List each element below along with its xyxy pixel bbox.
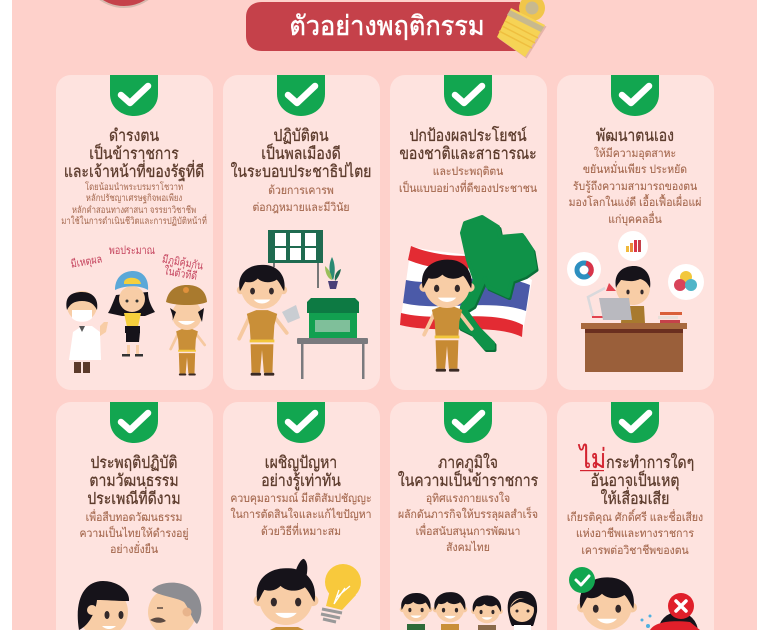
- card 8 heading: อันอาจเป็นเหตุ: [591, 470, 679, 491]
- desk: [581, 323, 687, 372]
- card 3 body text: เป็นแบบอย่างที่ดีของประชาชน: [399, 179, 538, 195]
- icon: venn bubble: [668, 264, 704, 300]
- card 2 heading: ในระบอบประชาธิปไตย: [231, 162, 371, 181]
- card 1 body text: หลักปรัชญาเศรษฐกิจพอเพียง: [86, 192, 182, 204]
- card 5 heading: ประเพณีที่ดีงาม: [87, 487, 181, 508]
- card 3 body text: และประพฤติตน: [433, 166, 504, 178]
- card 6 heading: เผชิญปัญหา: [265, 454, 337, 472]
- card 5 heading: ตามวัฒนธรรม: [89, 472, 179, 490]
- card 1 body text: มาใช้ในการดำเนินชีวิตและการปฏิบัติหน้าที่: [61, 214, 207, 226]
- figure: officer at desk: [615, 266, 650, 323]
- card 8 body text: เคารพต่อวิชาชีพของตน: [581, 544, 689, 557]
- card 8 heading: ไม่กระทำการใดๆ: [578, 443, 694, 474]
- panel: card 3 protect nation: [390, 75, 547, 390]
- figures: four civil servants: [400, 591, 537, 630]
- card 2 body text: ด้วยการเคารพ: [268, 185, 334, 197]
- card 5 body text: [79, 508, 189, 556]
- panel: card 4 self development: [557, 75, 714, 390]
- icon: green check badge: [277, 402, 325, 443]
- icon: light bulb: [321, 564, 361, 622]
- card 6 body text: ควบคุมอารมณ์ มีสติสัมปชัญญะ: [230, 492, 372, 505]
- card 6 heading: อย่างรู้เท่าทัน: [261, 472, 341, 490]
- notice board: [268, 230, 323, 288]
- card 7 body text: สังคมไทย: [446, 541, 490, 554]
- card 1 body text: โดยน้อมนำพระบรมราโชวาท: [85, 181, 183, 192]
- card 1 heading: เป็นข้าราชการ: [89, 143, 179, 163]
- icon: donut chart bubble: [567, 252, 601, 286]
- panel: card 8 no disrepute: [557, 402, 714, 630]
- card 5 body text: ความเป็นไทยให้ดำรงอยู่: [79, 525, 189, 540]
- computer monitor: [599, 298, 632, 320]
- card 7 body text: อุทิศแรงกายแรงใจ: [426, 492, 510, 505]
- card 5 body text: เพื่อสืบทอดวัฒนธรรม: [86, 508, 182, 524]
- card 1 body text: หลักคำสอนทางศาสนา จรรยาวิชาชีพ: [72, 204, 196, 215]
- icon: green check badge: [444, 75, 492, 116]
- icon: green check badge: [611, 402, 659, 443]
- card 7 heading: ภาคภูมิใจ: [438, 453, 498, 472]
- icon: green check badge: [110, 75, 158, 116]
- labels around figures: [70, 245, 204, 283]
- icon: green check badge: [277, 75, 325, 116]
- card 1 body text: [61, 181, 207, 226]
- card 1 heading: [64, 127, 204, 181]
- card 4 body text: ขยันหมั่นเพียร ประหยัด: [583, 160, 687, 176]
- figure: elderly man: [148, 583, 201, 630]
- labels around figures: ในตัวที่ดี: [163, 262, 198, 283]
- card 6 body text: ด้วยวิธีที่เหมาะสม: [261, 522, 341, 538]
- icon: wrong mark: [668, 593, 694, 619]
- icon: correct mark: [569, 567, 595, 593]
- card 6 body text: [230, 492, 372, 538]
- card 2 body text: ต่อกฎหมายและมีวินัย: [253, 201, 349, 214]
- card 5 body text: อย่างยั่งยืน: [110, 540, 158, 556]
- Thai flag: [400, 246, 532, 337]
- card 3 heading: ของชาติและสาธารณะ: [399, 145, 537, 163]
- card 6 heading: [261, 454, 341, 490]
- figure: girl with cap: [108, 271, 155, 356]
- card 8 body text: [567, 508, 703, 557]
- icon: golden rank tag: [497, 0, 546, 58]
- figure: officer voting: [237, 265, 300, 376]
- card 7 heading: [398, 453, 538, 490]
- panel: card 7 pride: [390, 402, 547, 630]
- card 7 heading: ในความเป็นข้าราชการ: [398, 470, 538, 490]
- card 7 body text: ผลักดันภารกิจให้บรรลุผลสำเร็จ: [398, 506, 538, 521]
- icon: bar chart bubble: [618, 231, 648, 261]
- panel: card 1 conduct: [56, 75, 213, 390]
- card 2 heading: เป็นพลเมืองดี: [261, 143, 341, 163]
- card 2 body text: [253, 185, 349, 214]
- card 7 body text: [398, 492, 538, 554]
- figure: doctor: [66, 291, 108, 373]
- card 8 body text: เกียรติคุณ ศักดิ์ศรี และชื่อเสียง: [567, 508, 703, 524]
- card 2 heading: ปฏิบัติตน: [274, 127, 329, 145]
- card 4 body text: รับรู้ถึงความสามารถของตน: [573, 181, 698, 193]
- card 8 heading: ให้เสื่อมเสีย: [601, 487, 669, 508]
- stack of books: [658, 312, 682, 323]
- labels around figures: พอประมาณ: [109, 245, 155, 257]
- icon: green check badge: [611, 75, 659, 116]
- card 4 body text: ให้มีความอุตสาหะ: [594, 147, 676, 160]
- panel: card 5 culture: [56, 402, 213, 630]
- card 1 heading: และเจ้าหน้าที่ของรัฐที่ดี: [64, 160, 204, 181]
- card 5 heading: [87, 454, 181, 508]
- card 3 heading: ปกป้องผลประโยชน์: [409, 126, 527, 145]
- card 7 body text: เพื่อสนับสนุนการพัฒนา: [416, 522, 520, 538]
- map of Thailand: [460, 217, 536, 350]
- heading banner: [246, 2, 520, 51]
- card 4 body text: [569, 147, 701, 226]
- card 1 heading: ดำรงตน: [109, 127, 160, 145]
- figure: young man: [78, 581, 129, 630]
- card 4 body text: แก่บุคคลอื่น: [608, 210, 662, 226]
- card 8 body text: แห่งอาชีพและทางราชการ: [576, 527, 694, 540]
- figure: angry woman: [640, 612, 700, 630]
- card 8 heading: [578, 443, 694, 508]
- card 6 body text: ในการตัดสินใจและแก้ไขปัญหา: [231, 508, 371, 521]
- figure: officer with hat: [166, 285, 207, 376]
- card 5 heading: ประพฤติปฏิบัติ: [90, 454, 178, 472]
- panel: card 2 citizen: [223, 75, 380, 390]
- card 4 body text: มองโลกในแง่ดี เอื้อเฟื้อเผื่อแผ่: [569, 193, 701, 209]
- desk lamp: [588, 283, 616, 318]
- heading text: ตัวอย่างพฤติกรรม: [289, 10, 485, 41]
- header emblem: red circle: [82, 0, 166, 8]
- figure: officer with flag: [419, 260, 475, 372]
- card 3 body text: [399, 166, 538, 195]
- labels around figures: มีภูมิคุ้มกัน: [161, 253, 204, 273]
- card 2 heading: [231, 127, 371, 181]
- panel: card 6 face problems: [223, 402, 380, 630]
- ballot box on table: [297, 298, 368, 379]
- card 4 heading: พัฒนาตนเอง: [596, 127, 674, 145]
- icon: green check badge: [110, 402, 158, 443]
- labels around figures: มีเหตุผล: [70, 253, 103, 271]
- potted plant: [325, 257, 341, 289]
- figure: officer thinking: [254, 559, 318, 630]
- figure: officer: [577, 577, 637, 630]
- card 3 heading: [399, 126, 537, 163]
- icon: green check badge: [444, 402, 492, 443]
